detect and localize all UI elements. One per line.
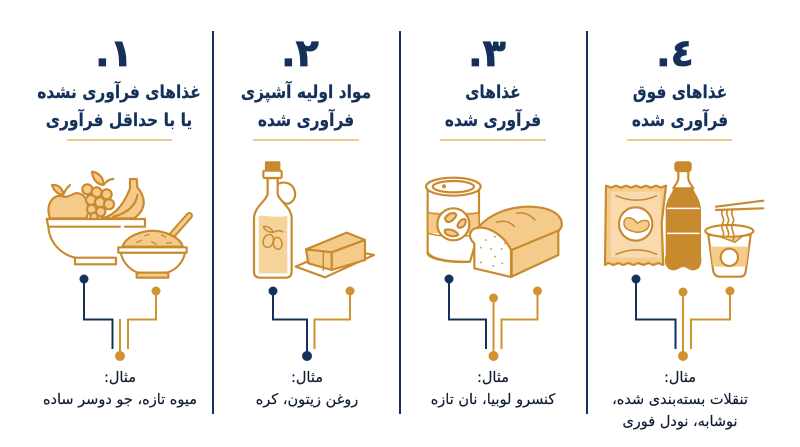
connector lines 2 xyxy=(268,286,354,361)
heading 4: فرآوری شده xyxy=(632,108,728,131)
example text 3: کنسرو لوبیا، نان تازه xyxy=(431,392,555,408)
icon: oil bottle and butter xyxy=(254,162,374,278)
connector lines 4 xyxy=(632,274,734,361)
icon: fruit bowl and oatmeal xyxy=(47,172,189,278)
example text 3: مثال: xyxy=(477,370,509,386)
example text 4: نوشابه، نودل فوری xyxy=(622,414,738,430)
panel: unprocessed foods xyxy=(37,31,201,408)
panel: ultra-processed foods xyxy=(605,31,763,430)
panel: processed culinary ingredients xyxy=(241,31,374,408)
heading 4: غذاهای فوق xyxy=(633,81,727,103)
number 3: ۳. xyxy=(468,31,506,75)
heading 2: مواد اولیه آشپزی xyxy=(241,80,371,103)
example text 4: تنقلات بسته‌بندی شده، xyxy=(612,392,748,408)
example text 1: مثال: xyxy=(104,370,136,386)
heading 1: یا با حداقل فرآوری xyxy=(46,108,192,131)
heading 2: فرآوری شده xyxy=(258,108,354,131)
icon: chips, soda and noodles xyxy=(605,162,763,277)
number 1: ۱. xyxy=(95,31,133,75)
heading 3: فرآوری شده xyxy=(445,108,541,131)
heading 1: غذاهای فرآوری نشده xyxy=(37,80,201,103)
example text 4: مثال: xyxy=(664,370,696,386)
number 4: ٤. xyxy=(656,31,694,75)
connector lines 1 xyxy=(80,274,160,361)
example text 2: روغن زیتون، کره xyxy=(256,392,358,408)
number 2: ۲. xyxy=(281,31,319,75)
heading 3: غذاهای xyxy=(465,81,521,102)
example text 2: مثال: xyxy=(291,370,323,386)
connector lines 3 xyxy=(444,274,542,361)
icon: canned beans and bread xyxy=(426,178,562,277)
panel: processed foods xyxy=(426,31,562,408)
example text 1: میوه تازه، جو دوسر ساده xyxy=(43,392,197,408)
